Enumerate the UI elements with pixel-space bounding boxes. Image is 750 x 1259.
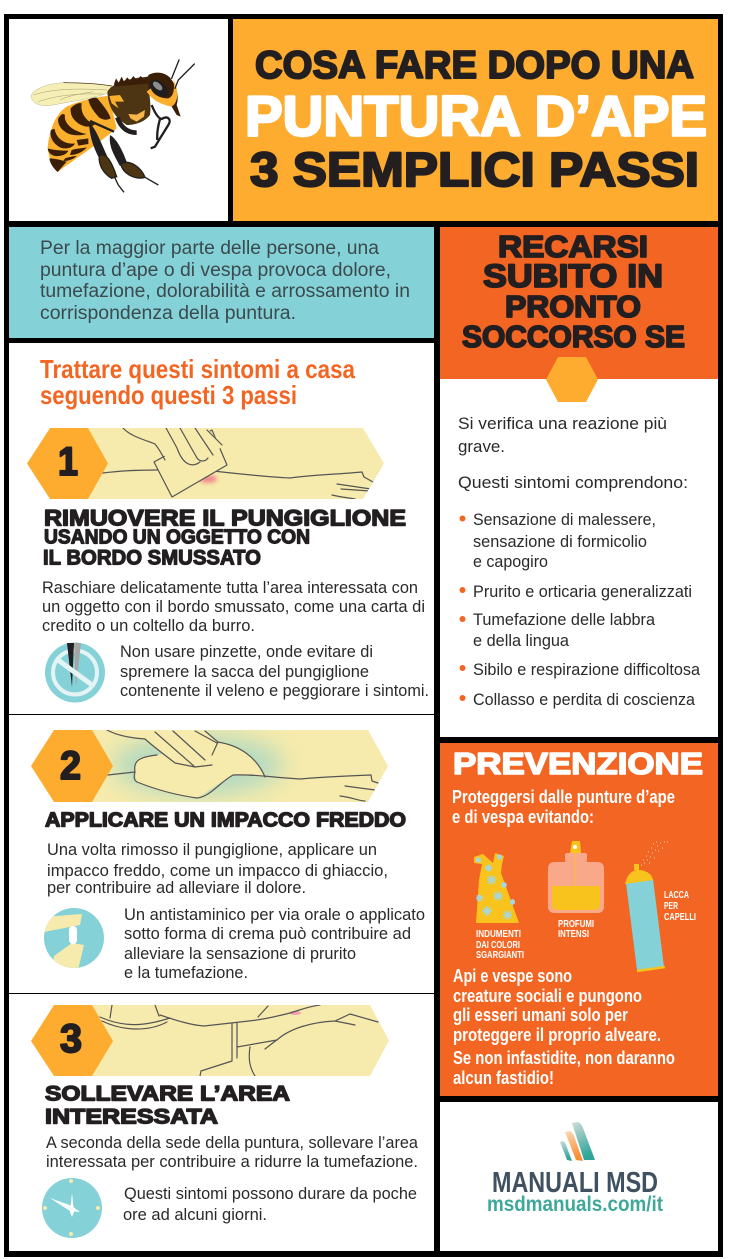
symptom list: Sensazione di malessere, [473, 511, 656, 529]
symptom list: Sibilo e respirazione difficoltosa [473, 661, 701, 679]
symptom list: Tumefazione delle labbra [473, 611, 656, 629]
label: hairspray: PER [664, 901, 679, 912]
label: bright clothes: DAI COLORI [476, 940, 520, 951]
step 2 number hexagon [31, 730, 113, 802]
label: bright clothes: SGARGIANTI [476, 950, 524, 961]
panel: prevention: PREVENZIONE [453, 746, 703, 781]
step 2 note: e la tumefazione. [124, 964, 248, 982]
prevention intro: Proteggersi dalle punture d’ape [452, 787, 675, 807]
step 2 note: sotto forma di crema può contribuire ad [124, 925, 411, 943]
step 2 note: alleviare la sensazione di prurito [124, 945, 356, 963]
title panel: PUNTURA D’APE [245, 84, 707, 148]
prevention text: Se non infastidite, non daranno [453, 1048, 675, 1068]
icon: logo blades [560, 1122, 595, 1161]
panel: emergency heading: SUBITO IN [483, 258, 663, 294]
prevention text: Api e vespe sono [453, 966, 572, 986]
panel: three steps [9, 343, 434, 1251]
symptom list: e della lingua [473, 632, 570, 650]
panel: intro text: tumefazione, dolorabilità e arrossamento in [40, 281, 410, 302]
step 1 banner [88, 428, 384, 499]
title panel: COSA FARE DOPO UNA [255, 44, 694, 87]
step 2 body text: Una volta rimosso il pungiglione, applicare un [47, 841, 377, 859]
step 1 heading: USANDO UN OGGETTO CON [44, 526, 310, 548]
panel: emergency heading: PRONTO [505, 289, 641, 324]
prevention text [453, 966, 675, 1088]
step 2 number hexagon: 2 [60, 744, 81, 788]
intro text: Questi sintomi comprendono: [458, 474, 688, 492]
prevention text: gli esseri umani solo per [453, 1005, 628, 1025]
prevention text: alcun fastidio! [453, 1068, 554, 1088]
symptom list: e capogiro [473, 553, 548, 571]
step 3 body text: A seconda della sede della puntura, sollevare l’area [46, 1134, 419, 1152]
panel: intro text: Per la maggior parte delle persone, una [40, 238, 379, 259]
label: hairspray [664, 890, 696, 923]
step 1 note [120, 643, 429, 700]
icon: dress [474, 853, 519, 923]
panel: prevention [440, 743, 718, 1096]
step 1 body text: un oggetto con il bordo smussato, come una carta di [42, 598, 425, 616]
icon: antihistamine pill [44, 908, 104, 970]
panel: intro text: corrispondenza della puntura. [40, 303, 296, 324]
step 1 body text [42, 579, 425, 635]
symptom list: Prurito e orticaria generalizzati [473, 583, 692, 601]
intro text: grave. [458, 438, 505, 456]
step 2 body text: impacco freddo, come un impacco di ghiaccio, [47, 862, 388, 880]
panel: bee illustration [9, 19, 228, 221]
panel: intro text [9, 227, 434, 338]
step 2 body text: per contribuire ad alleviare il dolore. [47, 879, 306, 897]
step 1 heading: RIMUOVERE IL PUNGIGLIONE [44, 505, 406, 530]
prevention intro: e di vespa evitando: [452, 807, 594, 827]
title panel: 3 SEMPLICI PASSI [250, 144, 699, 197]
step 1 body text: credito o un coltello da burro. [42, 617, 255, 635]
label: bright clothes: INDUMENTI [476, 929, 521, 940]
panel: severe symptoms [440, 379, 718, 737]
step 1 note: contenente il veleno e peggiorare i sintomi. [120, 682, 429, 700]
symptom list [460, 511, 701, 709]
panel: intro text: puntura d’ape o di vespa provoca dolore, [40, 260, 391, 281]
prevention text: proteggere il proprio alveare. [453, 1025, 661, 1045]
step 1 body text: Raschiare delicatamente tutta l’area interessata con [42, 579, 418, 597]
panel: emergency heading [440, 227, 718, 379]
step 3 heading: SOLLEVARE L’AREA [45, 1082, 290, 1106]
step 3 heading: INTERESSATA [45, 1104, 218, 1128]
step 1 heading: IL BORDO SMUSSATO [43, 546, 261, 569]
label: perfumes: INTENSI [558, 929, 589, 940]
step 3 number hexagon: 3 [60, 1017, 82, 1061]
title panel [233, 19, 718, 221]
prevention intro [452, 787, 675, 827]
step 2 body text [47, 841, 388, 897]
heading: treat at home: seguendo questi 3 passi [40, 380, 297, 410]
step 1 note: Non usare pinzette, onde evitare di [120, 643, 373, 661]
icon: hexagon [546, 357, 598, 402]
icon: no tweezers [45, 642, 105, 702]
step 3 body text: interessata per contribuire a ridurre la tumefazione. [46, 1153, 418, 1171]
step 2 note: Un antistaminico per via orale o applicato [124, 906, 425, 924]
heading: treat at home [40, 354, 355, 410]
step 1 heading [43, 505, 406, 569]
step 2 heading: APPLICARE UN IMPACCO FREDDO [45, 808, 406, 831]
icon: perfume [548, 841, 604, 913]
panel: logo: msdmanuals.com/it [487, 1193, 663, 1216]
panel: logo: MANUALI MSD [492, 1167, 658, 1199]
step 1 number hexagon: 1 [58, 440, 78, 484]
label: perfumes [558, 919, 594, 940]
step 3 heading [45, 1082, 290, 1128]
step 3 note: ore ad alcuni giorni. [123, 1206, 267, 1224]
icon: hairspray [625, 842, 668, 971]
step 2 note [124, 906, 425, 982]
step 1 note: spremere la sacca del pungiglione [120, 663, 369, 681]
intro text [458, 415, 688, 492]
intro text: Si verifica una reazione più [458, 415, 667, 433]
symptom list: sensazione di formicolio [473, 533, 647, 551]
label: bright clothes [476, 929, 524, 961]
label: hairspray: CAPELLI [664, 912, 696, 923]
step 3 note [123, 1185, 417, 1224]
panel: emergency heading: SOCCORSO SE [462, 319, 685, 354]
step 1 number hexagon [27, 428, 108, 499]
prevention text: creature sociali e pungono [453, 986, 642, 1006]
step 3 number hexagon [31, 1005, 113, 1076]
panel: emergency heading: RECARSI [498, 229, 648, 264]
label: hairspray: LACCA [664, 890, 689, 901]
step 3 banner [92, 1005, 389, 1076]
step 2 banner [92, 730, 388, 802]
icon: clock [42, 1178, 102, 1238]
panel: logo [440, 1102, 718, 1251]
step 3 body text [46, 1134, 419, 1171]
label: perfumes: PROFUMI [558, 919, 594, 930]
heading: treat at home: Trattare questi sintomi a casa [40, 354, 355, 384]
symptom list: Collasso e perdita di coscienza [473, 691, 696, 709]
step 3 note: Questi sintomi possono durare da poche [124, 1185, 417, 1203]
